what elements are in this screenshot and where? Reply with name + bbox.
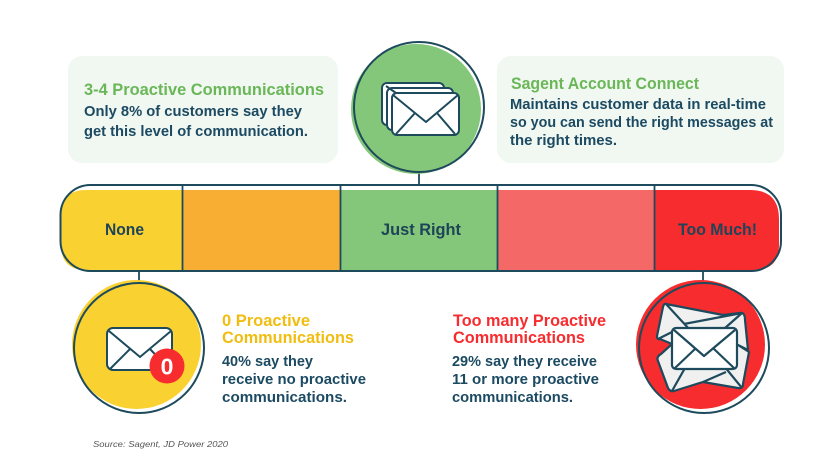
heading: 0 proactive communications: 0 Proactive — [222, 312, 310, 330]
heading: 0 proactive communications — [222, 312, 354, 347]
source note: Source: Sagent, JD Power 2020 — [93, 439, 228, 449]
text: maintains customer data: so you can send the right messages at — [510, 114, 773, 131]
text: maintains customer data — [510, 96, 773, 149]
text: only 8% of customers — [84, 103, 308, 140]
heading: too many proactive communications: Communications — [453, 329, 585, 347]
heading: sagent account connect: Sagent Account Connect — [511, 75, 699, 93]
text: 29% say they receive — [452, 353, 599, 406]
text: only 8% of customers: get this level of communication. — [84, 123, 308, 140]
text: 29% say they receive: communications. — [452, 389, 573, 406]
heading: 3-4 proactive communications: 3-4 Proactive Communications — [84, 81, 324, 99]
text: 40% say they — [222, 353, 366, 406]
text block: 0 proactive communications — [222, 312, 366, 406]
icon: yellow circle with envelope and zero badge: 0 — [161, 354, 173, 380]
icon: green circle with stacked envelopes — [351, 42, 484, 174]
heading: too many proactive communications: Too many Proactive — [453, 312, 606, 330]
connector: bar to yellow circle — [138, 270, 140, 284]
text: 40% say they: 40% say they — [222, 353, 314, 370]
panel: 3-4 proactive communications — [68, 56, 338, 163]
text: 40% say they: communications. — [222, 389, 347, 406]
label: too much: Too Much! — [678, 220, 757, 239]
label: none: None — [105, 220, 144, 239]
text: 40% say they: receive no proactive — [222, 371, 366, 388]
text: 29% say they receive: 29% say they receive — [452, 353, 597, 370]
connector: green circle to bar — [418, 171, 420, 186]
heading: too many proactive communications — [453, 312, 606, 347]
text: only 8% of customers: Only 8% of customers say they — [84, 103, 303, 120]
bar: communication scale — [60, 185, 781, 271]
icon: yellow circle with envelope and zero badge — [72, 280, 204, 413]
text: 29% say they receive: 11 or more proactive — [452, 371, 599, 388]
text: maintains customer data: Maintains customer data in real-time — [510, 96, 766, 113]
text block: too many proactive communications — [452, 312, 606, 406]
text: maintains customer data: the right times. — [510, 132, 617, 149]
heading: 0 proactive communications: Communications — [222, 329, 354, 347]
connector: bar to red circle — [702, 270, 704, 284]
icon: red circle with many envelopes — [636, 280, 769, 413]
label: just right: Just Right — [381, 220, 461, 239]
panel: sagent account connect — [497, 56, 784, 163]
